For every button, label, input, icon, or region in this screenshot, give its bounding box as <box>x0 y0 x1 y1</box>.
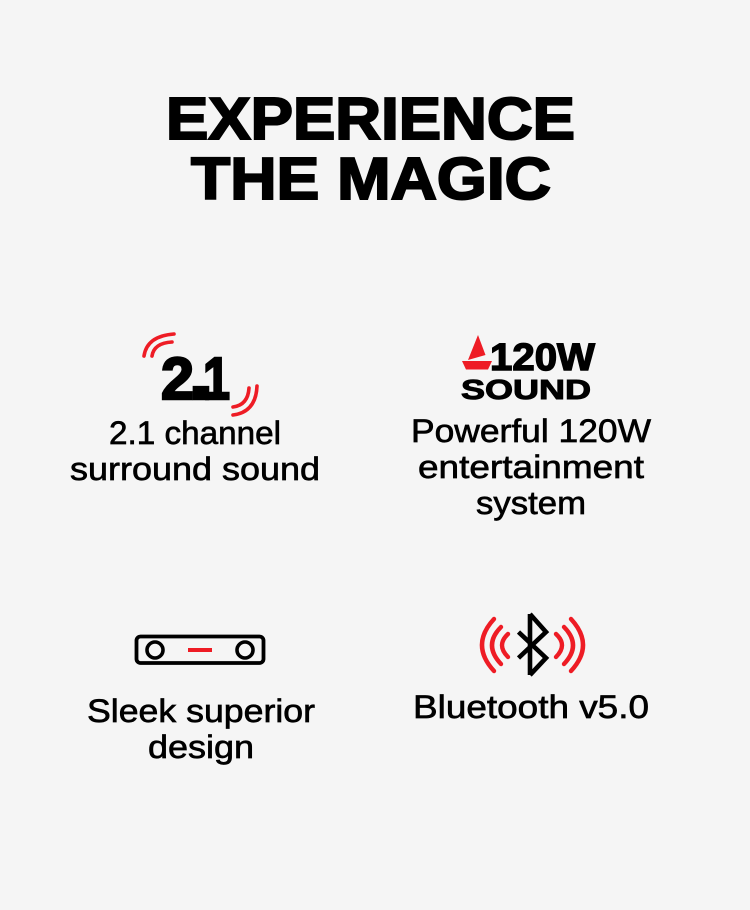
icon: 120W sound logo: 120W <box>490 337 595 379</box>
text: 2.1 channel surround sound: surround sound <box>70 451 320 487</box>
icon: bluetooth waves <box>482 614 583 675</box>
text: 2.1 channel surround sound: 2.1 channel <box>109 415 281 451</box>
icon: 120W sound logo: SOUND <box>461 374 591 405</box>
panel: sleek design <box>87 636 315 765</box>
icon: 2.1 surround <box>144 327 257 416</box>
title <box>166 86 575 212</box>
panel: 120W sound <box>411 335 652 521</box>
text: powerful 120W entertainment system: entertainment <box>418 449 644 485</box>
text: sleek superior design <box>87 693 315 765</box>
icon: 120W sound logo <box>461 335 595 405</box>
icon: soundbar <box>136 636 264 663</box>
text: sleek superior design: Sleek superior <box>87 693 315 729</box>
text: sleek superior design: design <box>148 729 254 765</box>
text: powerful 120W entertainment system <box>411 413 652 521</box>
icon: 2.1 surround: 2 <box>161 346 194 412</box>
icon: 2.1 surround: . <box>188 327 214 416</box>
icon: 2.1 surround: 1 <box>203 346 230 412</box>
title: THE MAGIC <box>191 146 551 212</box>
panel: 2.1 channel <box>70 327 320 487</box>
title: EXPERIENCE <box>166 86 575 152</box>
text: 2.1 channel surround sound <box>70 415 320 487</box>
text: bluetooth v5.0: Bluetooth v5.0 <box>413 689 649 725</box>
text: powerful 120W entertainment system: system <box>476 485 586 521</box>
panel: bluetooth <box>413 614 649 725</box>
text: powerful 120W entertainment system: Powerful 120W <box>411 413 652 449</box>
